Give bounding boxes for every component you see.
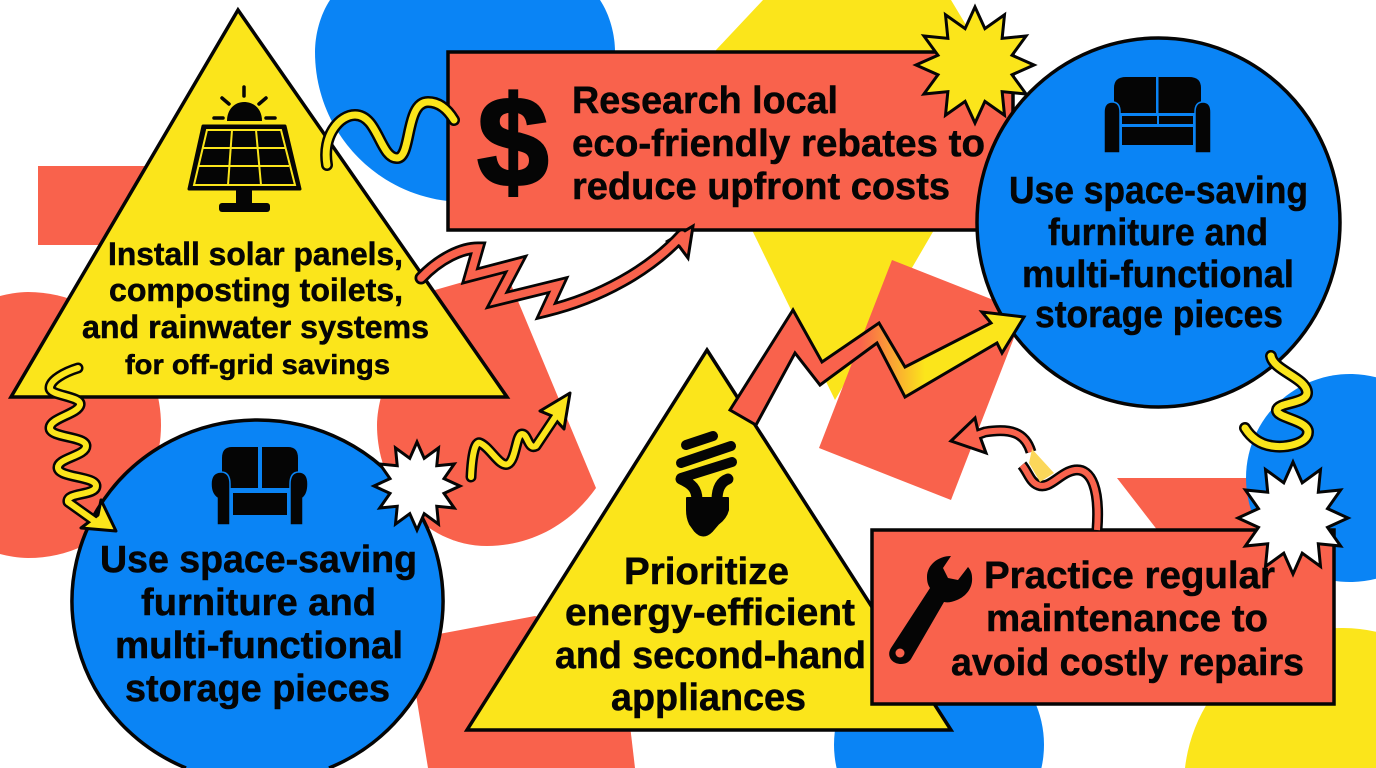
text: solar panels: and rainwater systems xyxy=(82,309,429,345)
icon: solar panel with sun xyxy=(189,87,300,212)
panel: energy-efficient appliances xyxy=(467,350,951,730)
arrow: yellow squiggle triangle to rebates xyxy=(326,102,454,165)
arrow: yellow wavy star to bulb triangle xyxy=(471,393,570,477)
panel: solar and off-grid systems xyxy=(11,10,507,397)
text: prioritize appliances: energy-efficient xyxy=(565,592,855,634)
text: practice maintenance: maintenance to xyxy=(986,598,1268,640)
text: research rebates: Research local xyxy=(572,80,838,122)
arrow: red-to-yellow zigzag bulb to furniture xyxy=(730,310,1024,425)
text: space-saving furniture: storage pieces xyxy=(1035,294,1283,336)
icon: armchair xyxy=(211,447,308,525)
text: solar panels xyxy=(82,236,429,380)
text: space-saving furniture: multi-functional xyxy=(115,625,403,667)
text: prioritize appliances: Prioritize xyxy=(624,551,789,593)
text: research rebates: eco-friendly rebates to xyxy=(572,123,985,165)
text: space-saving furniture: Use space-saving xyxy=(100,539,417,581)
text: space-saving furniture xyxy=(100,539,417,710)
text: practice maintenance xyxy=(951,555,1304,684)
text: space-saving furniture: Use space-saving xyxy=(1009,170,1308,212)
text: space-saving furniture: multi-functional xyxy=(1022,254,1294,296)
icon: sofa xyxy=(1104,77,1211,153)
text: prioritize appliances: appliances xyxy=(611,677,806,719)
starburst: white right xyxy=(1238,462,1348,574)
icon: CFL light bulb xyxy=(681,436,732,536)
arrow: red curved maintenance to square xyxy=(951,418,1098,530)
text: practice maintenance: Practice regular xyxy=(984,555,1275,597)
panel: space-saving furniture (top right) xyxy=(977,38,1340,407)
text: practice maintenance: avoid costly repairs xyxy=(951,642,1304,684)
text: space-saving furniture: furniture and xyxy=(141,582,376,624)
text: solar panels: composting toilets, xyxy=(109,272,403,308)
panel: practice maintenance xyxy=(872,530,1334,704)
text: solar panels: for off-grid savings xyxy=(125,349,390,380)
icon: dollar sign: $ xyxy=(477,71,549,214)
text: prioritize appliances: and second-hand xyxy=(555,635,866,677)
text: solar panels: Install solar panels, xyxy=(108,236,403,272)
icon: wrench xyxy=(889,556,972,664)
starburst: yellow top xyxy=(916,7,1034,123)
arrow: red zigzag solar to rebates xyxy=(421,226,693,311)
arrow: yellow squiggle furniture down right xyxy=(1245,356,1308,446)
text: research rebates xyxy=(572,80,985,208)
text: research rebates: reduce upfront costs xyxy=(572,166,950,208)
text: space-saving furniture: storage pieces xyxy=(125,668,390,710)
starburst: white left xyxy=(374,442,460,530)
panel: research rebates xyxy=(448,52,1013,230)
arrow: yellow wavy solar to furniture xyxy=(50,368,116,531)
panel: space-saving furniture (bottom left) xyxy=(72,420,443,768)
text: space-saving furniture: furniture and xyxy=(1048,212,1268,254)
text: space-saving furniture xyxy=(1009,170,1308,336)
text: prioritize appliances xyxy=(555,551,866,719)
